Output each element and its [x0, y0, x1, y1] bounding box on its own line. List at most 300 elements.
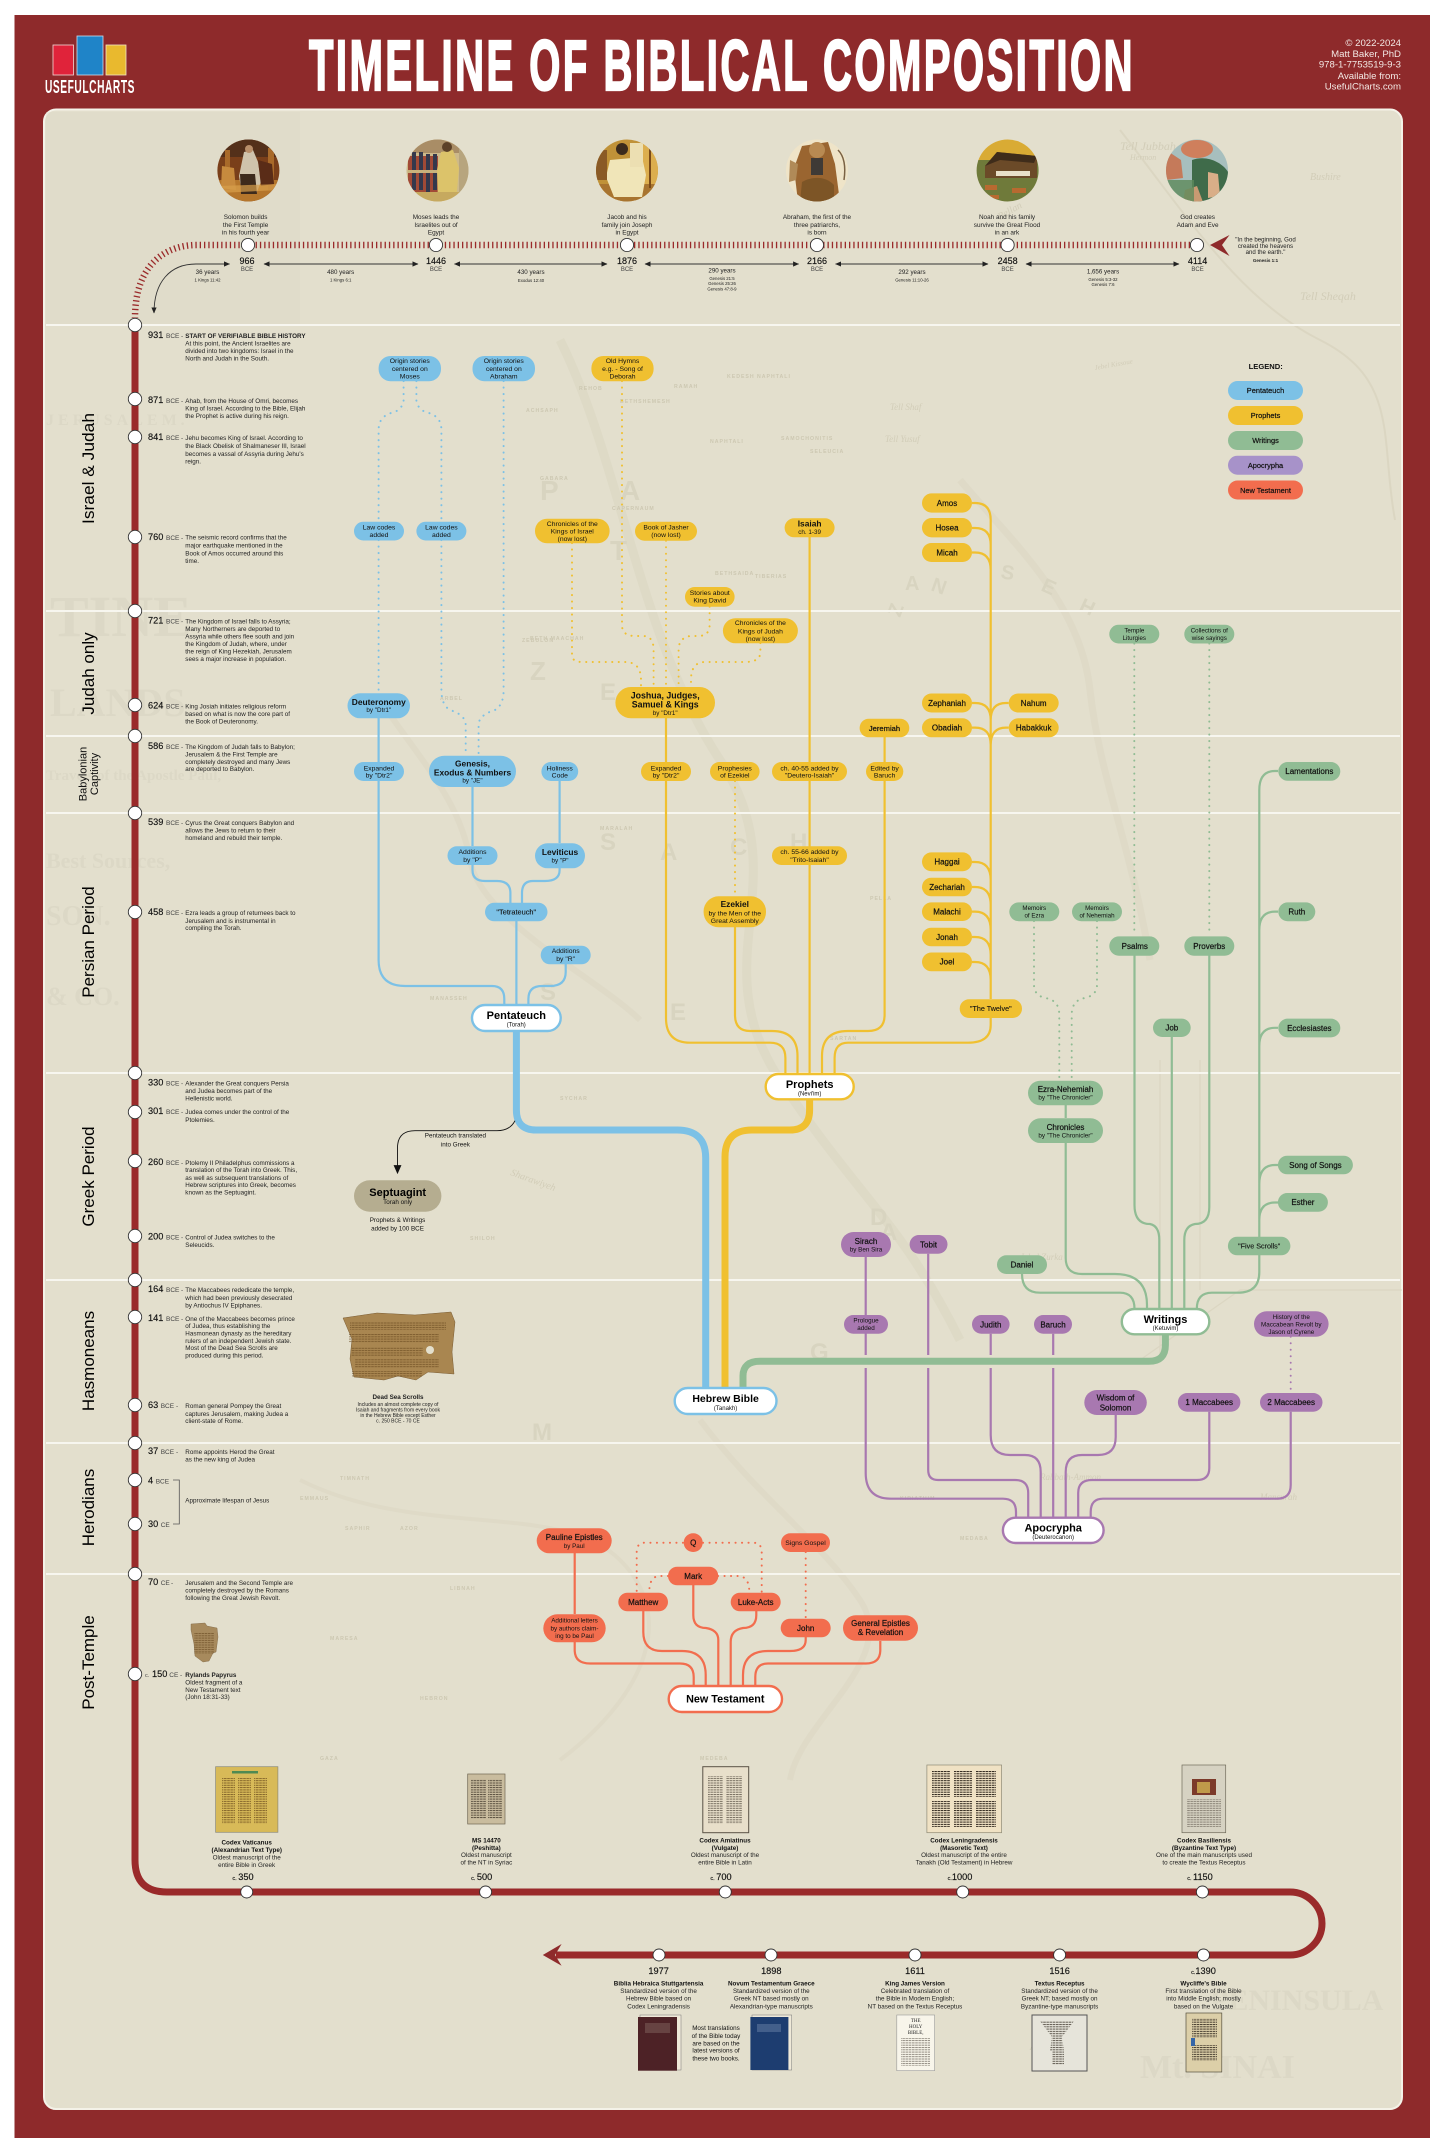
year labels: BCE	[811, 267, 823, 273]
manuscript: MS 14470: c. 500	[471, 1872, 492, 1882]
panel: parchment map background: H	[1076, 595, 1098, 621]
event 586 BCE: BCE	[166, 744, 180, 751]
pill: Lamentations: Lamentations	[1285, 767, 1333, 776]
event 586 BCE: completely destroyed and many Jews	[185, 759, 290, 766]
bible: Wycliffe's Bible: based on the Vulgate	[1174, 2004, 1234, 2011]
event 260 BCE: Ptolemy II Philadelphus commissions a	[185, 1160, 295, 1167]
pill: Temple Liturgies: Temple	[1124, 627, 1145, 634]
pill: Jeremiah: Jeremiah	[869, 724, 900, 733]
bible: King James Version: 1611	[905, 1966, 925, 1976]
pill: Origin stories centered on Moses	[379, 356, 441, 381]
event 760 BCE: time.	[185, 558, 199, 565]
pill: Wisdom of Solomon: Wisdom of	[1097, 1394, 1135, 1403]
pill: Sirach	[841, 1232, 891, 1257]
pill: Signs Gospel: Signs Gospel	[785, 1540, 826, 1547]
section dividers	[46, 325, 1400, 1574]
panel: parchment map background: NAPHTALI	[710, 439, 744, 445]
pill: Prologue added: added	[857, 1325, 875, 1332]
pill: Lamentations	[1278, 762, 1340, 781]
legend: Pentateuch	[1247, 386, 1284, 395]
pill: Prophesies of Ezekiel: Prophesies	[718, 765, 752, 772]
note: most translations: of the Bible today	[692, 2033, 741, 2040]
pill: Baruch: Baruch	[1040, 1320, 1066, 1329]
event 931 BCE: divided into two kingdoms: Israel in the	[185, 348, 294, 355]
event 539 BCE: Cyrus the Great conquers Babylon and	[185, 820, 295, 827]
tree: apocrypha	[841, 1232, 1329, 1543]
panel: parchment map background: EMMAUS	[300, 1496, 329, 1502]
pill: General Epistles and Revelation: General Epistles	[851, 1619, 910, 1628]
event 624 BCE: -	[181, 704, 183, 710]
event lifespan of Jesus: CE	[161, 1522, 170, 1529]
panel: parchment map background: SAPHIR	[345, 1526, 371, 1532]
event 301 BCE: Ptolemies.	[185, 1117, 215, 1124]
panel: parchment map background: C	[730, 834, 747, 861]
event 931 BCE: START OF VERIFIABLE BIBLE HISTORY	[185, 333, 306, 340]
event 539 BCE: -	[181, 820, 183, 827]
manuscript: Codex Leningradensis: (Masoretic Text)	[940, 1845, 988, 1852]
event 760 BCE: BCE	[166, 535, 180, 542]
pill: Book of Jasher: Book of Jasher	[643, 524, 689, 532]
pill: Holiness Code	[541, 762, 578, 781]
pill: Law codes added right	[416, 522, 466, 540]
year labels: 4114	[1188, 256, 1207, 266]
event 586 BCE: Jerusalem & the First Temple are	[185, 751, 278, 758]
event 871 BCE: the Prophet is active during his reign.	[185, 413, 289, 420]
event 760 BCE: major earthquake mentioned in the	[185, 543, 283, 550]
panel: parchment map background: ZEBULON	[522, 638, 554, 644]
legend: Apocrypha	[1248, 461, 1284, 470]
event 37 BCE: BCE	[161, 1449, 175, 1456]
event 141 BCE	[148, 1313, 295, 1360]
event 760 BCE	[148, 532, 287, 565]
panel: parchment map background: REHOB	[579, 386, 603, 392]
pill: Leviticus: by "P"	[551, 858, 569, 864]
period labels: Babylonian	[78, 747, 90, 801]
connector lines: pentateuch	[379, 381, 706, 1388]
panel: parchment map background: Jebel Kissoue	[1094, 357, 1133, 372]
arrowhead: timeline end	[543, 1944, 562, 1966]
pill: Amos	[922, 493, 972, 513]
event 624 BCE: the Book of Deuteronomy.	[185, 718, 258, 726]
bible: Textus Receptus: 1516	[1049, 1966, 1070, 1976]
year labels: BCE	[430, 267, 442, 273]
captions: is born	[807, 230, 827, 236]
pill: Judith	[972, 1315, 1010, 1334]
pill: Origin stories centered on Moses: Moses	[400, 374, 420, 380]
pill: Book of Jasher	[635, 522, 697, 541]
bible: King James Version: THE	[911, 2019, 921, 2024]
pill: Daniel: Daniel	[1011, 1260, 1034, 1270]
pill: Law codes added left: Law codes	[363, 524, 396, 532]
pill: Stories about King David	[685, 587, 735, 607]
bible: Wycliffe's Bible: c.1390	[1191, 1966, 1216, 1976]
bible: King James Version	[868, 1966, 962, 2071]
arrowhead: timeline start	[1210, 235, 1230, 256]
event 260 BCE: -	[181, 1160, 183, 1167]
event 63 BCE: -	[176, 1403, 178, 1410]
main vertical and bottom timeline	[128, 318, 1322, 1966]
panel: parchment map background: MEDABA	[960, 1536, 989, 1542]
portrait: Noah and the ark	[976, 139, 1039, 202]
bible: Wycliffe's Bible: into Middle English; mostly	[1166, 1996, 1242, 2003]
event 200 BCE: -	[181, 1234, 183, 1242]
pill: Chronicles of the Kings of Israel	[535, 519, 610, 543]
event 200 BCE: 200	[148, 1232, 163, 1242]
note: most translations: are based on the	[692, 2040, 740, 2047]
pill: Job: Job	[1165, 1024, 1179, 1033]
duration arrows	[154, 264, 1179, 313]
event 931 BCE: North and Judah in the South.	[185, 356, 269, 362]
panel: parchment map background: SHILOH	[470, 1236, 496, 1242]
event 871 BCE	[148, 395, 306, 420]
event 301 BCE: 301	[148, 1106, 163, 1116]
panel: parchment map background: Z	[530, 656, 546, 686]
event lifespan of Jesus: BCE	[156, 1478, 170, 1486]
event 586 BCE: The Kingdom of Judah falls to Babylon;	[185, 744, 295, 751]
bible: Wycliffe's Bible	[1165, 1966, 1242, 2072]
pill: Judith: Judith	[980, 1320, 1001, 1329]
event 721 BCE: BCE	[166, 618, 180, 626]
pill: ch. 55-66 Trito-Isaiah: "Trito-Isaiah"	[790, 857, 829, 864]
pill: History of the Maccabean Revolt	[1254, 1311, 1329, 1337]
panel: parchment map background: SYCHAR	[560, 1096, 588, 1102]
panel: parchment map background: ARBEL	[440, 696, 463, 702]
panel: parchment map background: SON.	[46, 901, 111, 932]
pill: Genesis, Exodus and Numbers: by "JE"	[462, 778, 483, 785]
panel: parchment map background: M	[532, 1419, 552, 1446]
event 841 BCE: reign.	[185, 458, 201, 465]
captions: Solomon builds	[224, 214, 267, 221]
event 260 BCE: BCE	[166, 1160, 180, 1167]
connector lines: writings	[743, 644, 1278, 1388]
bible: Biblia Hebraica Stuttgartensia: Hebrew Bible based on	[626, 1996, 692, 2003]
panel: parchment map background: A	[660, 839, 677, 866]
pill: Memoirs of Ezra: of Ezra	[1024, 913, 1045, 920]
pill: ch. 40-55 Deutero-Isaiah	[772, 762, 847, 781]
pill: Joshua, Judges, Samuel and Kings	[615, 687, 715, 718]
panel: parchment map background: TIBERIAS	[755, 574, 787, 580]
pill: Hosea	[922, 518, 972, 537]
duration labels and references: Genesis 21:5	[709, 276, 735, 281]
portrait: God creates Adam and Eve	[1166, 139, 1230, 202]
bibles lower row	[614, 1966, 1242, 2072]
pill: Old Hymns: Old Hymns	[606, 358, 640, 365]
pill: Memoirs of Ezra: Memoirs	[1022, 905, 1046, 912]
pill: History of the Maccabean Revolt: Jason of Cyrene	[1268, 1329, 1315, 1336]
year labels: 1876	[617, 256, 637, 266]
pill: New Testament: New Testament	[686, 1694, 765, 1706]
pill: Chronicles: by "The Chronicler"	[1038, 1132, 1093, 1140]
panel: parchment map background: KEDESH NAPHTALI	[727, 374, 791, 380]
pill: Prophets (Nevi'im): Prophets	[786, 1079, 834, 1091]
panel: parchment map background: Mt. SINAI	[1140, 2049, 1295, 2086]
panel: parchment map background: MEDEBA	[700, 1756, 728, 1762]
panel: parchment map background: TIMNATH	[340, 1476, 370, 1482]
period labels	[78, 413, 101, 1710]
panel: parchment map background: Z	[884, 601, 909, 620]
header: logo, title and credits	[45, 27, 1402, 106]
legend: New Testament	[1240, 486, 1291, 495]
panel: parchment map background: G	[810, 1339, 829, 1366]
panel: parchment map background: LIBNAH	[450, 1586, 476, 1592]
pill: Baruch	[1034, 1315, 1072, 1334]
pill: ch. 55-66 Trito-Isaiah	[772, 846, 847, 865]
pill: Collections of wise sayings: Collections of	[1191, 627, 1228, 634]
pill: Esther: Esther	[1291, 1198, 1315, 1207]
pill: General Epistles and Revelation: & Revelation	[858, 1628, 903, 1637]
captions: survive the Great Flood	[974, 222, 1041, 229]
pill: Proverbs: Proverbs	[1193, 942, 1225, 951]
event 841 BCE	[148, 432, 306, 465]
event 931 BCE: At this point, the Ancient Israelites are	[185, 340, 291, 348]
event 37 BCE	[148, 1446, 275, 1464]
portrait: Solomon builds the First Temple	[217, 139, 280, 202]
bible: Novum Testamentum Graece: Novum Testamentum Graece	[728, 1981, 815, 1988]
panel: parchment map background: GABARA	[540, 476, 569, 482]
event 721 BCE: Assyria while others flee south and join	[185, 634, 295, 640]
captions	[222, 214, 1219, 236]
quote: in the beginning: "In the beginning, God	[1235, 237, 1296, 244]
pill: 1 Maccabees: 1 Maccabees	[1185, 1398, 1233, 1407]
pill: History of the Maccabean Revolt: Maccabean Revolt by	[1261, 1321, 1322, 1328]
pill: Hosea: Hosea	[935, 524, 959, 532]
event 586 BCE: 586	[148, 741, 163, 751]
pill: Zephaniah: Zephaniah	[928, 699, 966, 708]
pill: Joel	[922, 952, 972, 971]
panel: parchment map background: Hermon	[1129, 153, 1156, 162]
panel: parchment map background: Bellan	[996, 200, 1024, 223]
timeline nodes	[241, 238, 1204, 252]
event 458 BCE: Ezra leads a group of returnees back to	[185, 910, 296, 917]
panel: parchment map background: MARESA	[330, 1636, 358, 1642]
event 301 BCE: Judea comes under the control of the	[185, 1109, 290, 1116]
bible: King James Version: the Bible in Modern English;	[876, 1996, 954, 2003]
tree: writings	[743, 625, 1353, 1388]
pill: Psalms	[1109, 936, 1159, 956]
legend: Writings	[1252, 436, 1279, 445]
event lifespan of Jesus: 30	[148, 1519, 158, 1529]
event 70 CE	[148, 1577, 293, 1602]
event 200 BCE: Control of Judea switches to the	[185, 1234, 275, 1242]
event 721 BCE: Many Northerners are deported to	[185, 626, 281, 633]
panel: parchment map background: PENINSULA	[1210, 1984, 1384, 2017]
pill: Additions by P: Additions	[459, 849, 487, 856]
quote: in the beginning: created the heavens	[1238, 243, 1293, 250]
pill: Additions by R: Additions	[552, 948, 580, 955]
panel: parchment map background: & CO.	[46, 982, 120, 1011]
event 539 BCE: BCE	[166, 820, 180, 827]
panel: parchment map background: E	[1038, 575, 1059, 600]
bible: Textus Receptus	[1021, 1966, 1098, 2071]
pill: Chronicles of the Kings of Judah: Kings of Judah	[738, 628, 783, 635]
pill: Song of Songs	[1278, 1156, 1353, 1174]
event 141 BCE: Hasmonean dynasty as the hereditary	[185, 1330, 292, 1338]
manuscript: Codex Basiliensis	[1156, 1765, 1252, 1882]
pill: Writings (Ketuvim)	[1122, 1309, 1209, 1334]
event 301 BCE	[148, 1106, 290, 1124]
event 586 BCE: are deported to Babylon.	[185, 766, 255, 773]
manuscript: Codex Basiliensis: Codex Basiliensis	[1177, 1838, 1231, 1845]
captions: family join Joseph	[602, 222, 653, 229]
event 539 BCE: allows the Jews to return to their	[185, 827, 276, 834]
pill: Signs Gospel	[781, 1533, 830, 1552]
event 63 BCE: BCE	[161, 1403, 175, 1410]
event 330 BCE: and Judea becomes part of the	[185, 1088, 273, 1095]
event 871 BCE: King of Israel. According to the Bible, Elijah	[185, 406, 306, 412]
panel: parchment map background: BETHSHEMESH	[620, 399, 671, 405]
event c. 150 CE Rylands Papyrus: New Testament text	[185, 1687, 241, 1694]
portrait: Moses leads the Israelites	[406, 139, 469, 202]
event 931 BCE: 931	[148, 330, 163, 340]
bible: Textus Receptus: Byzantine-type manuscripts	[1021, 2004, 1098, 2011]
manuscript: Codex Vaticanus	[211, 1767, 282, 1882]
pill: Prophesies of Ezekiel: of Ezekiel	[720, 773, 750, 780]
year labels: 966	[239, 256, 255, 266]
manuscript: MS 14470: of the NT in Syriac	[461, 1860, 512, 1867]
duration labels and references: Genesis 11:10-26	[895, 277, 929, 282]
bible: Biblia Hebraica Stuttgartensia	[614, 1966, 704, 2071]
pill: Psalms: Psalms	[1122, 942, 1148, 951]
panel: parchment map background: Best Sources,	[46, 848, 170, 873]
duration labels and references: 292 years	[898, 269, 926, 276]
bible: Wycliffe's Bible: Wycliffe's Bible	[1180, 1981, 1227, 1988]
panel: parchment map background: ACHSAPH	[526, 408, 559, 414]
pill: Job	[1153, 1019, 1191, 1037]
pill: Tetrateuch	[485, 903, 548, 921]
pill: Writings (Ketuvim): Writings	[1144, 1314, 1187, 1326]
connector lines: new testament	[575, 1543, 880, 1686]
caption: Dead Sea Scrolls: Dead Sea Scrolls	[372, 1394, 424, 1401]
pill: Septuagint: Torah only	[383, 1199, 413, 1206]
captions: the First Temple	[223, 222, 269, 229]
panel: parchment map background: P	[540, 475, 559, 506]
panel: parchment map background: HEBRON	[420, 1696, 448, 1702]
event 586 BCE	[148, 741, 295, 773]
manuscript: Codex Vaticanus: entire Bible in Greek	[218, 1862, 276, 1869]
pill: Wisdom of Solomon: Solomon	[1100, 1404, 1131, 1413]
event 721 BCE: The Kingdom of Israel falls to Assyria;	[185, 618, 291, 626]
quote: in the beginning: Genesis 1:1	[1253, 258, 1279, 263]
logo: UsefulCharts: USEFULCHARTS	[45, 76, 135, 97]
panel: parchment map background: MANASSEH	[430, 996, 468, 1002]
year labels: 2458	[998, 256, 1018, 266]
duration labels and references: 480 years	[327, 269, 354, 276]
pill: General Epistles and Revelation	[843, 1615, 918, 1641]
duration labels and references: Genesis 5:3-32	[1088, 277, 1118, 282]
event 63 BCE: Roman general Pompey the Great	[185, 1403, 281, 1410]
event 63 BCE	[148, 1400, 289, 1425]
manuscript: Codex Amiatinus: entire Bible in Latin	[698, 1860, 752, 1867]
pill: Ezra-Nehemiah: Ezra-Nehemiah	[1038, 1085, 1093, 1094]
panel: parchment map background: H	[790, 829, 807, 856]
event 458 BCE: Jerusalem and is instrumental in	[185, 918, 276, 925]
year labels: BCE	[1191, 267, 1204, 273]
event 260 BCE: translation of the Torah into Greek. This,	[185, 1167, 297, 1174]
pill: Leviticus: Leviticus	[542, 847, 578, 857]
event 624 BCE: BCE	[166, 704, 180, 710]
connector lines: prophets	[572, 381, 1009, 1388]
bible: Biblia Hebraica Stuttgartensia: 1977	[648, 1966, 669, 1976]
period labels: Captivity	[89, 752, 101, 795]
pill: Haggai: Haggai	[934, 858, 960, 867]
year labels: 2166	[807, 256, 827, 266]
manuscript: Codex Leningradensis: Codex Leningradensis	[930, 1838, 998, 1845]
pill: Song of Songs: Song of Songs	[1289, 1161, 1342, 1170]
pill: Five Scrolls	[1228, 1237, 1290, 1255]
image: Rylands papyrus fragment	[191, 1623, 218, 1662]
note: most translations: latest versions of	[692, 2048, 740, 2055]
panel: parchment map background: BETHSAIDA	[715, 571, 754, 577]
pill: Apocrypha (Deuterocanon)	[1003, 1518, 1104, 1543]
panel: parchment map background: Jebel Zurka	[1020, 1252, 1063, 1262]
pill: Genesis, Exodus and Numbers	[429, 756, 516, 787]
manuscript: Codex Vaticanus: c. 350	[232, 1872, 254, 1882]
pill: 1 Maccabees	[1178, 1393, 1240, 1412]
pill: Chronicles of the Kings of Israel: (now lost)	[558, 536, 587, 543]
panel: parchment map background: SARTAN	[830, 1036, 857, 1042]
event lifespan of Jesus: Approximate lifespan of Jesus	[185, 1498, 269, 1504]
pill: Esther	[1278, 1193, 1328, 1212]
manuscript: Codex Amiatinus: (Vulgate)	[712, 1845, 738, 1852]
event 760 BCE: Book of Amos occurred around this	[185, 550, 283, 558]
event 37 BCE: -	[176, 1449, 178, 1456]
legend	[1228, 362, 1303, 500]
event 141 BCE: Most of the Dead Sea Scrolls are	[185, 1345, 278, 1352]
event 164 BCE: which had been previously desecrated	[184, 1295, 293, 1302]
pill: Nahum: Nahum	[1021, 699, 1047, 708]
duration labels and references: 1,656 years	[1087, 268, 1119, 276]
pill: The Twelve: "The Twelve"	[970, 1004, 1012, 1013]
pill: Haggai	[922, 852, 972, 871]
event 871 BCE: Ahab, from the House of Omri, becomes	[185, 398, 298, 405]
pill: Chronicles	[1028, 1118, 1103, 1143]
pill: Pentateuch (Torah): (Torah)	[507, 1022, 526, 1028]
captions: Noah and his family	[979, 214, 1036, 221]
pill: Ecclesiastes: Ecclesiastes	[1287, 1024, 1332, 1033]
event 37 BCE: as the new king of Judea	[185, 1456, 255, 1464]
panel: parchment map background: SELEUCIA	[810, 449, 844, 455]
legend: LEGEND:	[1249, 362, 1283, 371]
event 260 BCE: as well as subsequent translations of	[185, 1175, 288, 1182]
event 164 BCE: 164	[148, 1284, 163, 1294]
pill: Expanded by Dtr2: Expanded	[651, 765, 682, 772]
pill: Chronicles of the Kings of Judah	[723, 618, 798, 643]
event 760 BCE: -	[181, 535, 183, 542]
bible: Novum Testamentum Graece: Standardized version of the	[733, 1988, 810, 1995]
event 260 BCE: known as the Septuagint.	[185, 1190, 256, 1196]
bible: Biblia Hebraica Stuttgartensia: Codex Leningradensis	[627, 2004, 690, 2011]
pill: Amos: Amos	[937, 499, 957, 508]
tree: prophets	[535, 356, 1059, 1388]
pill: ch. 40-55 Deutero-Isaiah: ch. 40-55 added by	[780, 765, 839, 772]
top timeline: creation to divided kingdom	[135, 139, 1296, 318]
event 330 BCE: Alexander the Great conquers Persia	[185, 1080, 289, 1088]
event 37 BCE: Rome appoints Herod the Great	[185, 1449, 275, 1456]
event 458 BCE: compiling the Torah.	[185, 925, 242, 932]
manuscript: Codex Vaticanus: Oldest manuscript of the	[213, 1855, 281, 1862]
event 330 BCE: 330	[148, 1078, 163, 1088]
event 200 BCE: Seleucids.	[185, 1242, 215, 1249]
manuscript: Codex Amiatinus	[691, 1767, 760, 1882]
period labels: Herodians	[79, 1469, 98, 1546]
panel: parchment map background: A	[880, 1219, 897, 1246]
pill: 2 Maccabees: 2 Maccabees	[1267, 1398, 1315, 1407]
image: Dead Sea Scrolls	[343, 1312, 455, 1424]
captions: Adam and Eve	[1177, 222, 1219, 229]
pill: ch. 55-66 Trito-Isaiah: ch. 55-66 added by	[780, 849, 839, 856]
note: most translations: Most translations	[692, 2025, 740, 2032]
event 70 CE: completely destroyed by the Romans	[185, 1588, 289, 1594]
